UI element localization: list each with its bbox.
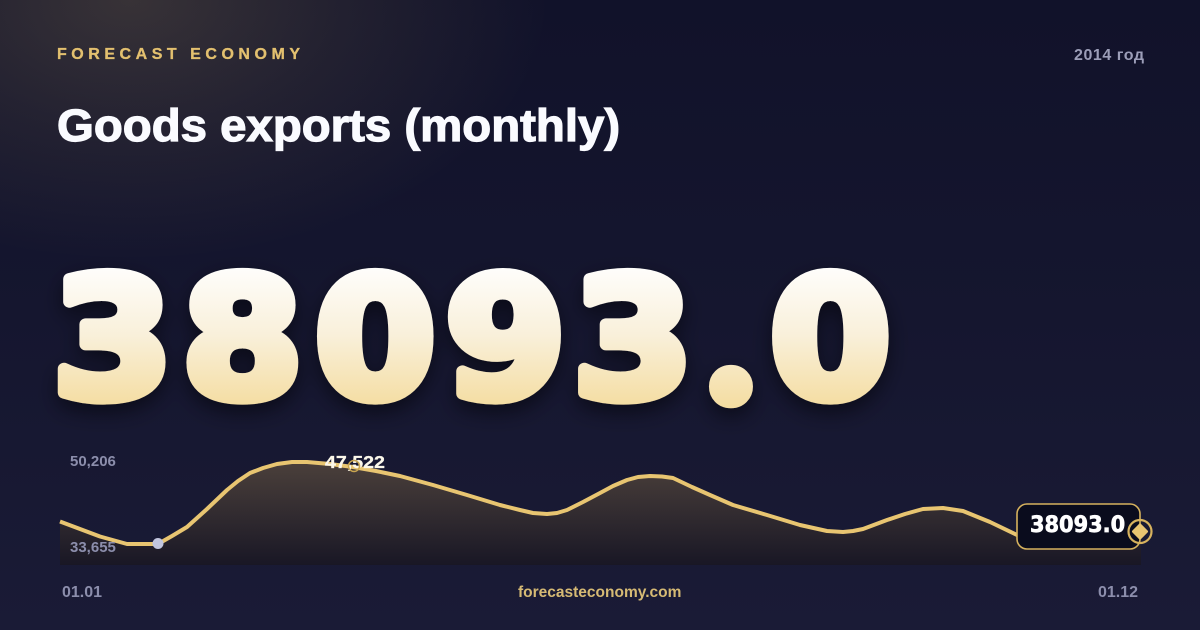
title: Goods exports (monthly) bbox=[57, 100, 620, 151]
axis max label: 50,206 bbox=[70, 453, 116, 470]
chart line bbox=[60, 462, 1040, 545]
peak value label: 47,522 bbox=[325, 452, 385, 472]
start date label: 01.01 bbox=[62, 584, 102, 601]
current value callout: 38093.0 bbox=[1030, 513, 1125, 538]
axis min label: 33,655 bbox=[70, 539, 116, 556]
source website: forecasteconomy.com bbox=[518, 584, 681, 601]
end date label: 01.12 bbox=[1098, 584, 1138, 601]
minimum point marker bbox=[152, 538, 164, 549]
chart area fill bbox=[60, 462, 1141, 565]
year label: 2014 год bbox=[1074, 47, 1144, 64]
peak point marker bbox=[348, 460, 360, 472]
main value: 38093 bbox=[52, 243, 693, 435]
sparkline chart bbox=[60, 452, 1152, 565]
current point marker bbox=[1128, 520, 1152, 543]
brand eyebrow: FORECAST ECONOMY bbox=[57, 46, 300, 63]
current value callout bbox=[1017, 504, 1140, 549]
main value: . bbox=[701, 218, 760, 449]
main value: 0 bbox=[770, 243, 891, 435]
